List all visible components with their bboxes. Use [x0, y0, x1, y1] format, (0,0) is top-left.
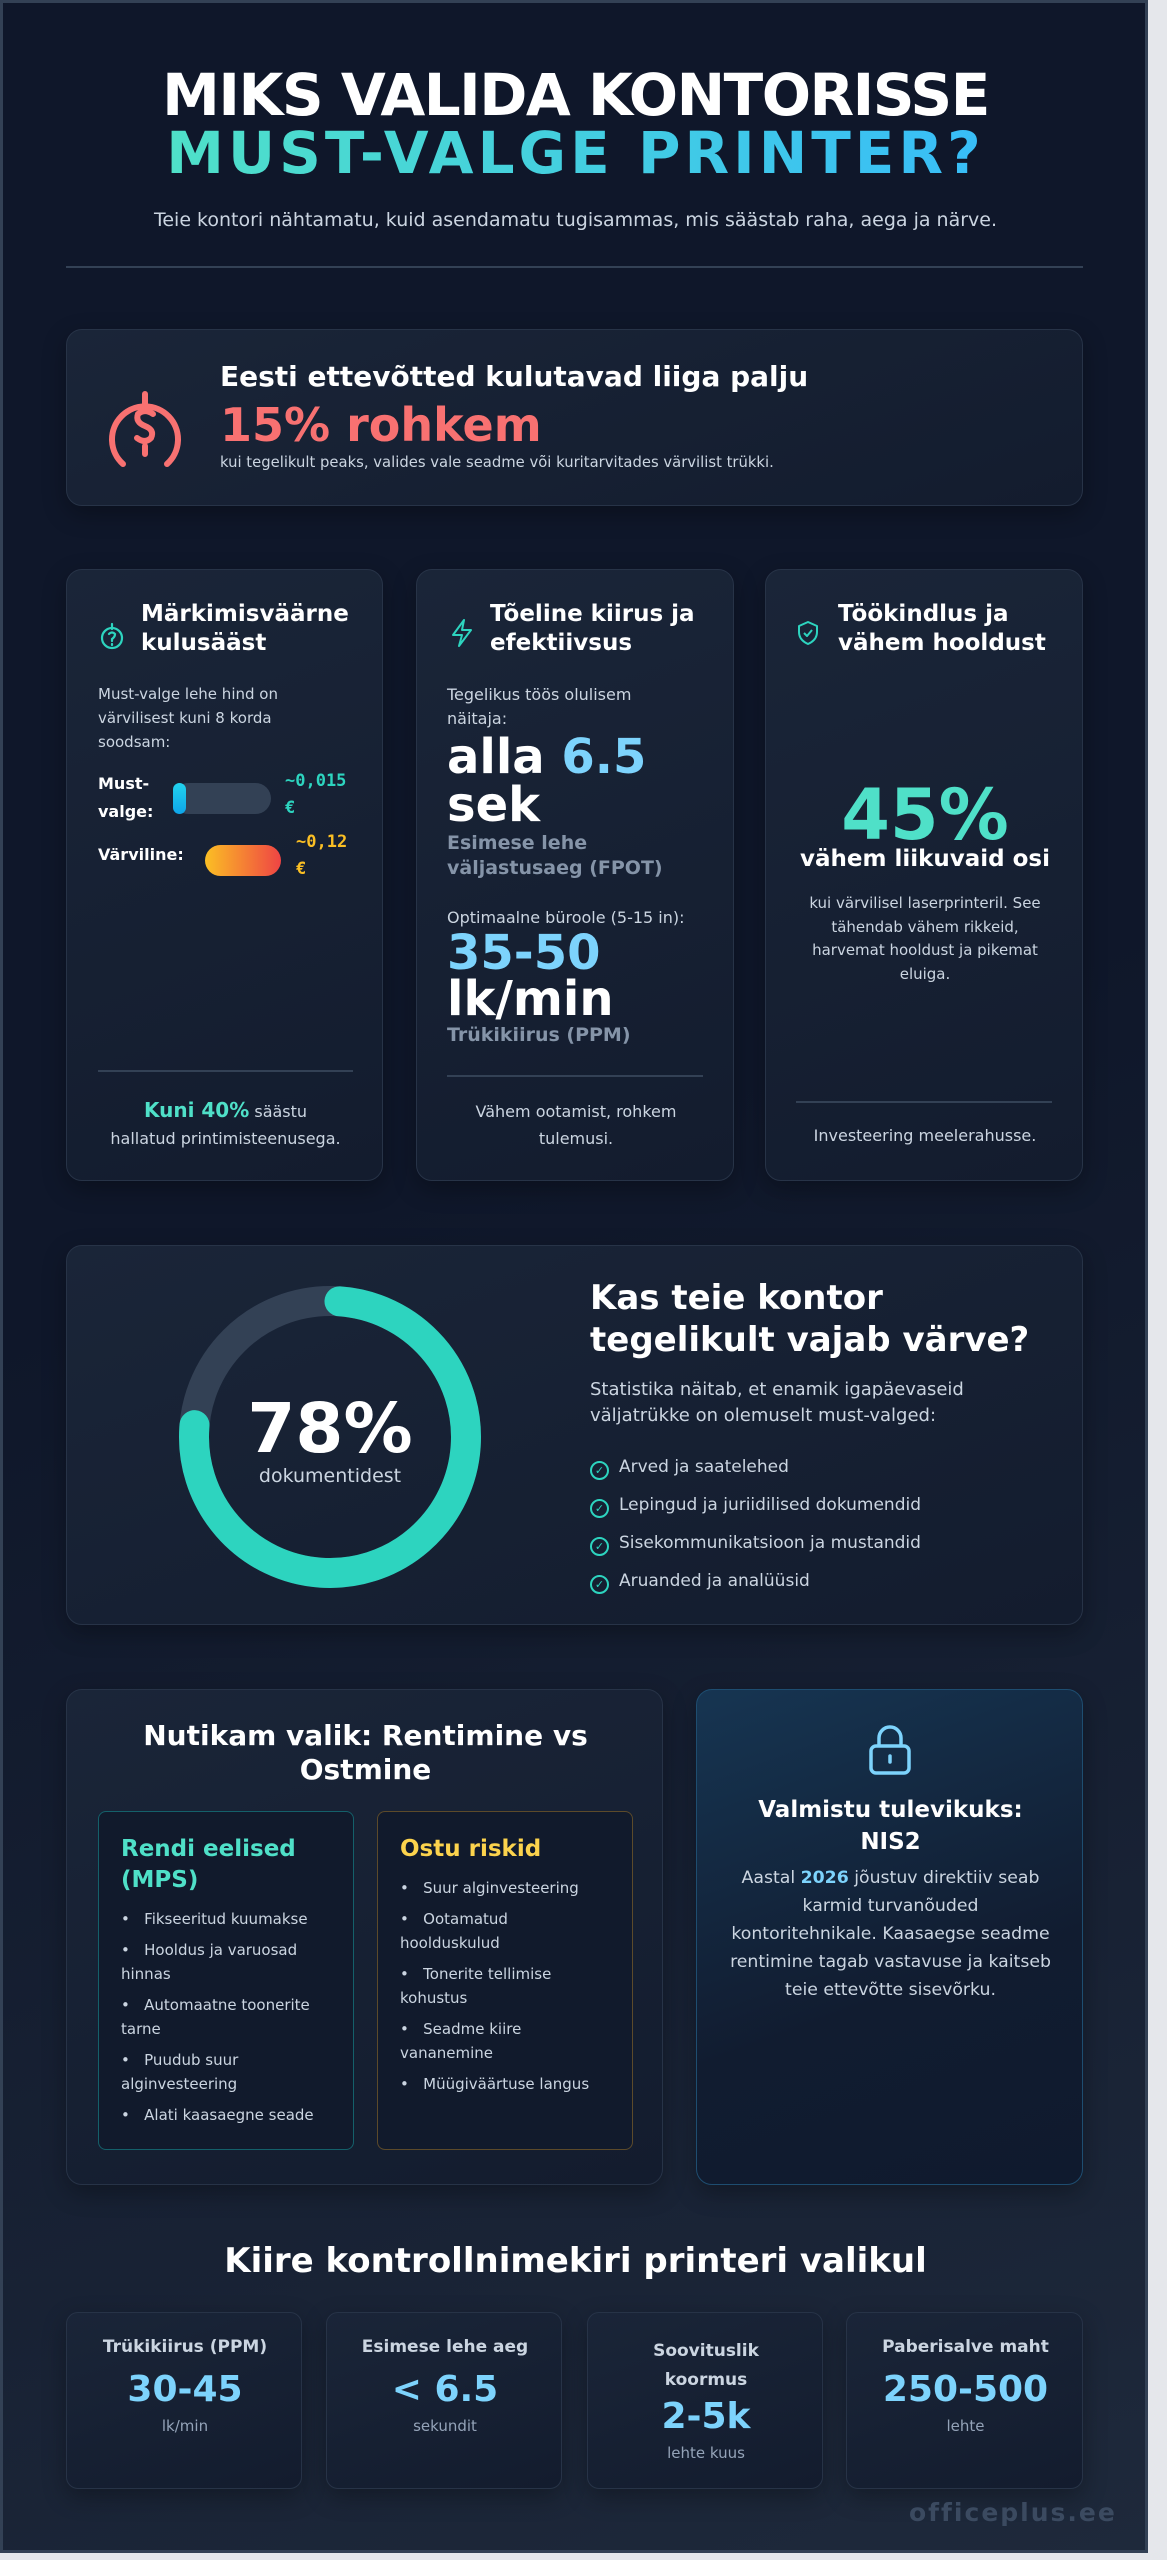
- icon: coin: [100, 622, 124, 650]
- FPOT stat: alla 6.5: [447, 729, 646, 785]
- stat card: load: 2-5k: [662, 2396, 750, 2437]
- stat card: PPM: Trükikiirus (PPM): [103, 2337, 267, 2357]
- checklist: Lepingud ja juriidilised dokumendid: [619, 1495, 921, 1515]
- sub-panel: purchase risks: • Müügiväärtuse langus: [400, 2075, 589, 2093]
- sub-panel: purchase risks: • Suur alginvesteering: [400, 1879, 579, 1897]
- heading: [490, 601, 695, 656]
- FPOT stat: Tegelikus töös olulisem: [447, 685, 631, 704]
- checklist: ✓: [595, 1540, 604, 1553]
- sub-panel: rent benefits: • Automaatne toonerite tarne: [121, 1996, 310, 2038]
- PPM stat: lk/min: [447, 971, 614, 1027]
- sub-panel: purchase risks: • Seadme kiire vananemine: [400, 2020, 521, 2062]
- body: Aastal 2026 jõustuv direktiiv seab karmid turvanõuded kontoritehnikale. Kaasaegse seadme rentimine tagab vastavuse ja kaitseb teie ettevõtte sisevõrku.: [730, 1868, 1051, 2000]
- sub-panel: rent benefits: • Hooldus ja varuosad hinnas: [121, 1941, 297, 1983]
- bar: must-valge: [98, 771, 346, 821]
- heading: [143, 1719, 588, 1786]
- icon: shield: [798, 621, 818, 645]
- subtitle: Teie kontori nähtamatu, kuid asendamatu tugisammas, mis säästab raha, aega ja närve.: [154, 209, 997, 231]
- sub-panel: rent benefits: [98, 1811, 354, 2150]
- desc: kui värvilisel laserprinteril. See tähendab vähem rikkeid, harvemat hooldust ja pikemat eluiga.: [809, 894, 1041, 982]
- heading: Eesti ettevõtted kulutavad liiga palju: [220, 360, 808, 393]
- sub-panel: rent benefits: • Fikseeritud kuumakse: [121, 1910, 308, 1928]
- donut chart: [179, 1286, 481, 1588]
- sub-panel: purchase risks: [377, 1811, 633, 2150]
- footer note: Kuni 40% säästu: [144, 1098, 307, 1122]
- bar: must-valge: valge:: [98, 802, 153, 821]
- stat card: FPOT: sekundit: [413, 2417, 477, 2435]
- watermark: officeplus.ee: [909, 2498, 1117, 2527]
- footer note: [110, 1098, 341, 1148]
- donut chart: 78%: [247, 1389, 413, 1469]
- panel: rent vs buy: [66, 1689, 663, 2185]
- sub-panel: rent benefits: Rendi eelised: [121, 1836, 296, 1862]
- heading: [141, 601, 349, 656]
- sub-panel: rent benefits: (MPS): [121, 1867, 198, 1893]
- sub-panel: rent benefits: • Puudub suur alginvesteering: [121, 2051, 238, 2093]
- bar: must-valge: ~0,015: [285, 771, 346, 791]
- checklist heading: Kiire kontrollnimekiri printeri valikul: [224, 2241, 927, 2281]
- PPM stat: Trükikiirus (PPM): [447, 1024, 631, 1046]
- bar: värviline: ~0,12: [296, 832, 347, 852]
- footer note: tulemusi.: [539, 1129, 613, 1148]
- panel: NIS2: [696, 1689, 1083, 2185]
- stat card: FPOT: Esimese lehe aeg: [362, 2337, 528, 2357]
- stat card: PPM: lk/min: [162, 2417, 208, 2435]
- checklist: [590, 1457, 921, 1594]
- stat card: tray: 250-500: [883, 2369, 1048, 2410]
- stat card: tray: lehte: [946, 2417, 984, 2435]
- stat card: PPM: 30-45: [127, 2369, 243, 2410]
- stat card: tray: [846, 2312, 1083, 2489]
- heading: kulusääst: [141, 630, 266, 656]
- sub-panel: purchase risks: • Tonerite tellimise kohustus: [400, 1965, 551, 2007]
- stat card: PPM: [66, 2312, 302, 2489]
- sub-panel: purchase risks: • Ootamatud hoolduskulud: [400, 1910, 508, 1952]
- FPOT stat: sek: [447, 777, 540, 833]
- PPM stat: 35-50: [447, 925, 601, 981]
- heading: Tõeline kiirus ja: [490, 601, 695, 627]
- heading: efektiivsus: [490, 630, 632, 656]
- heading: tegelikult vajab värve?: [590, 1320, 1029, 1360]
- desc: Must-valge lehe hind on värvilisest kuni 8 korda soodsam:: [98, 685, 278, 751]
- checklist: ✓: [595, 1578, 604, 1591]
- bar: must-valge: €: [285, 798, 295, 818]
- PPM stat: [447, 908, 685, 1046]
- footer note: hallatud printimisteenusega.: [110, 1129, 341, 1148]
- stat card: FPOT: [326, 2312, 562, 2489]
- footer note: Vähem ootamist, rohkem: [476, 1102, 676, 1121]
- stat card: load: koormus: [665, 2370, 747, 2390]
- footer note: Investeering meelerahusse.: [814, 1126, 1036, 1145]
- bar: must-valge: Must-: [98, 774, 149, 793]
- desc: [590, 1379, 964, 1426]
- sub-panel: rent benefits: • Alati kaasaegne seade: [121, 2106, 314, 2124]
- panel: speed: [416, 569, 734, 1181]
- icon: money: [109, 391, 181, 467]
- heading: Märkimisväärne: [141, 601, 349, 627]
- stat card: load: [587, 2312, 823, 2489]
- heading: NIS2: [860, 1829, 921, 1855]
- bar: värviline: Värviline:: [98, 845, 184, 864]
- panel: savings: [66, 569, 383, 1181]
- heading: [590, 1278, 1029, 1360]
- heading: vähem hooldust: [838, 630, 1046, 656]
- PPM stat: Optimaalne büroole (5-15 in):: [447, 908, 685, 927]
- stat card: tray: Paberisalve maht: [882, 2337, 1049, 2357]
- stat card: load: lehte kuus: [667, 2444, 745, 2462]
- big stat: 45%: [841, 774, 1009, 856]
- heading: Valmistu tulevikuks:: [758, 1797, 1023, 1823]
- panel: reliability: [765, 569, 1083, 1181]
- bar: värviline: [98, 832, 347, 879]
- title: [162, 61, 989, 187]
- bar: värviline: €: [296, 859, 306, 879]
- checklist: Aruanded ja analüüsid: [619, 1571, 810, 1591]
- desc: Statistika näitab, et enamik igapäevaseid: [590, 1379, 964, 1400]
- checklist: Arved ja saatelehed: [619, 1457, 789, 1477]
- footer note: [476, 1102, 676, 1148]
- desc: väljatrükke on olemuselt must-valged:: [590, 1405, 936, 1426]
- big stat: 15% rohkem: [220, 398, 542, 452]
- title: MUST-VALGE PRINTER?: [166, 119, 985, 187]
- heading: Ostmine: [300, 1753, 431, 1786]
- note: kui tegelikult peaks, valides vale seadme või kuritarvitades värvilist trükki.: [220, 454, 774, 471]
- stat card: FPOT: < 6.5: [392, 2369, 498, 2410]
- FPOT stat: Esimese lehe: [447, 832, 587, 854]
- FPOT stat: näitaja:: [447, 709, 507, 728]
- icon: bolt: [452, 619, 472, 647]
- panel: reliability: vähem liikuvaid osi: [800, 846, 1050, 872]
- heading: [758, 1797, 1023, 1855]
- panel: donut: [66, 1245, 1083, 1625]
- title: MIKS VALIDA KONTORISSE: [162, 61, 989, 129]
- FPOT stat: väljastusaeg (FPOT): [447, 857, 663, 879]
- heading: [838, 601, 1046, 656]
- donut chart: dokumentidest: [259, 1465, 401, 1487]
- panel: 15% more: [66, 329, 1083, 506]
- FPOT stat: [446, 685, 663, 879]
- checklist: ✓: [595, 1502, 604, 1515]
- heading: Töökindlus ja: [838, 601, 1009, 627]
- sub-panel: purchase risks: Ostu riskid: [400, 1836, 541, 1862]
- checklist: ✓: [595, 1464, 604, 1477]
- icon: lock: [869, 1725, 911, 1775]
- stat card: load: Soovituslik: [653, 2341, 759, 2361]
- heading: Nutikam valik: Rentimine vs: [143, 1719, 588, 1752]
- heading: Kas teie kontor: [590, 1278, 883, 1318]
- checklist: Sisekommunikatsioon ja mustandid: [619, 1533, 921, 1553]
